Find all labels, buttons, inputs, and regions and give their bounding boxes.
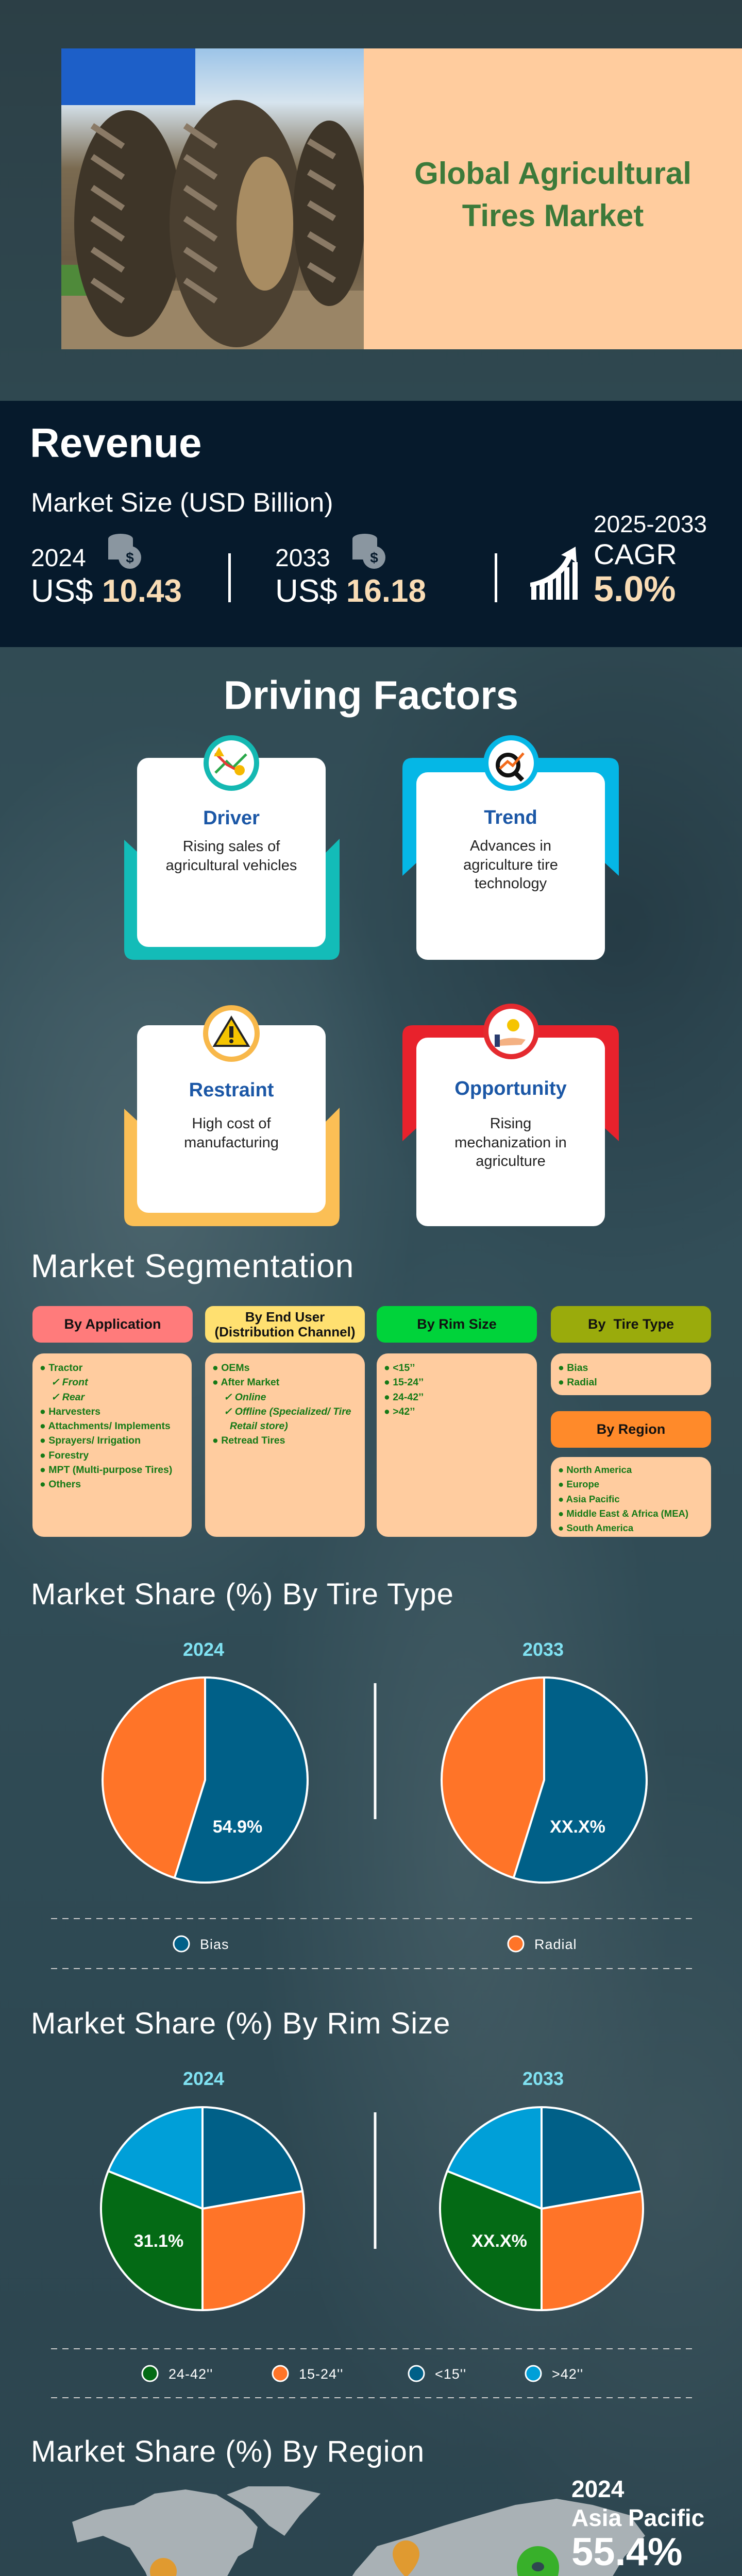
segment: by end user: (Distribution Channel) xyxy=(214,1324,355,1340)
chart: rim size pies: XX.X% xyxy=(471,2231,527,2251)
CAGR block: 2025-2033 xyxy=(594,511,707,537)
CAGR block: CAGR xyxy=(594,538,677,570)
chart: rim size pies: 31.1% xyxy=(134,2231,183,2251)
stat 2033: 2033 xyxy=(275,545,330,572)
icon: coins xyxy=(352,534,385,569)
segment: by tire type and region: ● South America xyxy=(558,1522,633,1533)
pie 2024 xyxy=(101,2107,304,2310)
pin: asia pacific xyxy=(517,2546,559,2576)
pins xyxy=(150,2540,419,2576)
stat 2024: 2024 xyxy=(31,545,86,572)
segment: by tire type and region: ● Radial xyxy=(558,1377,597,1388)
pie 2033 xyxy=(440,2107,643,2310)
segment: by rim size: ● <15’’ xyxy=(384,1362,415,1374)
chart: tire type pies: XX.X% xyxy=(550,1817,605,1837)
icon: growth chart xyxy=(530,547,578,600)
market size label: Market Size (USD Billion) xyxy=(31,488,333,518)
legend: rim size: 15-24'' xyxy=(299,2366,343,2382)
title panel: Tires Market xyxy=(462,198,644,233)
segment: by end user xyxy=(205,1306,365,1537)
heading: market share by tire type: Market Share (%) By Tire Type xyxy=(31,1578,454,1611)
segment: by end user: Retail store) xyxy=(230,1420,288,1432)
segment: by rim size xyxy=(377,1306,537,1537)
card: opportunity xyxy=(402,1004,619,1226)
segment: by application: ● Harvesters xyxy=(40,1406,100,1417)
card: trend: Trend xyxy=(484,807,537,828)
legend: tire type: Bias xyxy=(200,1937,229,1952)
chart: rim size pies: 2024 xyxy=(183,2068,224,2089)
segment: by rim size: ● 15-24’’ xyxy=(384,1377,424,1388)
card: driver xyxy=(124,735,340,960)
divider xyxy=(228,553,231,602)
callout: asia pacific share xyxy=(571,2476,704,2574)
heading: driving factors: Driving Factors xyxy=(224,672,518,718)
CAGR block: 5.0% xyxy=(594,569,676,609)
segment: by end user: ✓ Offline (Specialized/ Tire xyxy=(224,1406,351,1417)
card: restraint: manufacturing xyxy=(184,1134,279,1151)
segment: by application: ● Forestry xyxy=(40,1450,89,1461)
card: restraint: High cost of xyxy=(192,1115,272,1132)
heading: market segmentation: Market Segmentation xyxy=(31,1247,354,1284)
segment: by tire type and region xyxy=(551,1306,711,1537)
CAGR block xyxy=(594,511,707,609)
callout: asia pacific share: 2024 xyxy=(571,2476,624,2502)
segment: by application: ● Tractor xyxy=(40,1362,82,1374)
legend: rim size: 24-42'' xyxy=(168,2366,213,2382)
segment: by tire type and region: ● Middle East & Africa (MEA) xyxy=(558,1508,688,1519)
segment: by application: ● Sprayers/ Irrigation xyxy=(40,1435,141,1446)
card: trend xyxy=(402,735,619,960)
segment: by end user: ● Retread Tires xyxy=(212,1435,285,1446)
chart: tire type pies: 2033 xyxy=(522,1639,564,1660)
card: restraint xyxy=(124,1005,340,1226)
title panel: Global Agricultural xyxy=(414,156,692,191)
chart: rim size pies xyxy=(51,2068,692,2398)
chart: rim size pies: 2033 xyxy=(522,2068,564,2089)
legend: rim size: <15'' xyxy=(435,2366,466,2382)
card: trend: technology xyxy=(475,875,547,892)
card: driver: Rising sales of xyxy=(183,838,280,855)
segment: by tire type and region: ● Bias xyxy=(558,1362,588,1374)
revenue heading: Revenue xyxy=(30,420,201,466)
stat 2024 xyxy=(31,534,182,609)
icon: coins: $ xyxy=(370,550,378,566)
legend: tire type: Radial xyxy=(534,1937,577,1952)
card: trend: Advances in xyxy=(470,838,551,854)
segment: by end user: ✓ Online xyxy=(224,1392,266,1403)
stat 2033 xyxy=(275,534,426,609)
segment: by tire type and region: ● North America xyxy=(558,1464,632,1475)
segment: by rim size: ● >42’’ xyxy=(384,1406,415,1417)
chart: tire type pies: 2024 xyxy=(183,1639,224,1660)
card: opportunity: agriculture xyxy=(476,1153,546,1170)
segment: by application: ✓ Front xyxy=(51,1377,88,1388)
icon: opportunity xyxy=(483,1004,539,1059)
segment: by rim size: By Rim Size xyxy=(417,1316,497,1332)
segment: by application xyxy=(32,1306,193,1537)
stat 2024: US$ 10.43 xyxy=(31,573,182,609)
legend: rim size: >42'' xyxy=(552,2366,583,2382)
header photo: tractor tires xyxy=(61,48,364,349)
segment: by application: ● Others xyxy=(40,1479,81,1490)
segment: by rim size: ● 24-42’’ xyxy=(384,1392,424,1403)
card: restraint: Restraint xyxy=(189,1079,274,1101)
icon: warning xyxy=(203,1005,260,1062)
segment: by application: ● Attachments/ Implements xyxy=(40,1420,171,1432)
driving factors cards xyxy=(124,735,619,1226)
segment: by application: By Application xyxy=(64,1316,161,1332)
world map with pins xyxy=(72,2486,645,2576)
legend: tire type xyxy=(174,1936,577,1952)
segment: by tire type and region: By Region xyxy=(597,1421,665,1437)
segment: by tire type and region: ● Asia Pacific xyxy=(558,1494,619,1504)
card: opportunity: Opportunity xyxy=(454,1078,567,1099)
chart: tire type pies xyxy=(51,1639,692,1969)
segment: by end user: ● OEMs xyxy=(212,1362,249,1374)
card: driver: agricultural vehicles xyxy=(166,857,297,874)
legend: rim size xyxy=(142,2366,583,2382)
card: opportunity: Rising xyxy=(490,1115,531,1132)
segment: by end user: ● After Market xyxy=(212,1377,279,1388)
pie 2024 xyxy=(103,1677,308,1883)
segment: by end user: By End User xyxy=(245,1309,325,1325)
divider xyxy=(495,553,497,602)
card: driver: Driver xyxy=(203,807,260,829)
heading: market share by rim size: Market Share (%) By Rim Size xyxy=(31,2007,450,2040)
icon: trend xyxy=(483,735,539,791)
card: opportunity: mechanization in xyxy=(454,1134,567,1151)
card: trend: agriculture tire xyxy=(463,857,558,873)
stat 2033: US$ 16.18 xyxy=(275,573,426,609)
pie 2033 xyxy=(442,1677,647,1883)
icon: driver xyxy=(204,735,259,791)
heading: market share by region: Market Share (%) By Region xyxy=(31,2435,425,2468)
title panel xyxy=(364,48,742,349)
callout: asia pacific share: Asia Pacific xyxy=(571,2504,704,2531)
segment: by tire type and region: ● Europe xyxy=(558,1479,599,1489)
callout: asia pacific share: 55.4% xyxy=(571,2530,682,2574)
revenue band xyxy=(0,401,742,647)
segment: by application: ● MPT (Multi-purpose Tires) xyxy=(40,1464,172,1476)
segment: by application: ✓ Rear xyxy=(51,1392,85,1403)
icon: coins xyxy=(108,534,141,569)
chart: tire type pies: 54.9% xyxy=(213,1817,262,1837)
icon: coins: $ xyxy=(126,550,134,566)
segment: by tire type and region: By Tire Type xyxy=(588,1316,674,1332)
